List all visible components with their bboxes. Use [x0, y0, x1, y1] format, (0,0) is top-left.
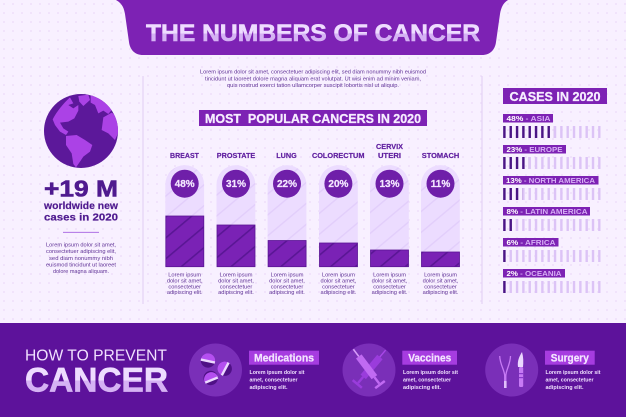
- chart: colorectum 20%: consectetuer: [322, 284, 355, 290]
- label: medications: Lorem ipsum dolor sit: [250, 370, 305, 376]
- chart: stomach 11%: dolor sit amet,: [423, 278, 459, 284]
- label: surgery: [545, 351, 601, 391]
- chart: colorectum 20%: [312, 151, 364, 296]
- description text: euismod tincidunt ut laoreet: [46, 262, 116, 268]
- subheading: worldwide new: [43, 200, 119, 212]
- chart: stomach 11%: 11%: [431, 179, 450, 190]
- chart: lung 22%: dolor sit amet,: [269, 278, 305, 284]
- prevention heading: CANCER: [25, 362, 168, 400]
- intro text block: Lorem ipsum dolor sit amet, consectetuer adipiscing elit, sed diam nonummy nibh euismod: [200, 70, 426, 76]
- icon: globe: [44, 94, 120, 168]
- chart: lung 22%: adipiscing elit.: [269, 290, 305, 296]
- row: latin america: 8% - LATIN AMERICA: [506, 209, 588, 216]
- label: vaccines: adipiscing elit.: [403, 385, 441, 391]
- panel: cases by region: [503, 88, 607, 287]
- chart: breast 48%: adipiscing elit.: [167, 290, 203, 296]
- chart: cervix uteri 13%: CERVIX: [376, 142, 403, 151]
- row: oceania: [503, 269, 600, 287]
- header banner: [116, 0, 508, 55]
- row: oceania: 2% - OCEANIA: [506, 271, 562, 278]
- subheading: cases in 2020: [44, 212, 118, 224]
- intro text block: quis nostrud exerci tation ullamcorper suscipit lobortis nisl ut aliquip.: [227, 83, 399, 89]
- label: surgery: Surgery: [551, 352, 590, 364]
- row: asia: 48% - ASIA: [506, 116, 550, 123]
- chart: colorectum 20%: COLORECTUM: [312, 151, 364, 160]
- panel: worldwide cases: [43, 94, 120, 275]
- chart: breast 48%: [165, 151, 204, 296]
- chart: prostate 31%: consectetuer: [220, 284, 252, 290]
- chart: colorectum 20%: dolor sit amet,: [321, 278, 357, 284]
- description text: [46, 242, 116, 275]
- row: latin america: [503, 207, 600, 225]
- chart: cervix uteri 13%: consectetuer: [373, 284, 406, 290]
- label: surgery: amet, consectetuer: [546, 378, 594, 384]
- label: medications: [249, 351, 319, 391]
- chart: cervix uteri 13%: 13%: [379, 179, 400, 190]
- row: africa: 6% - AFRICA: [506, 240, 556, 247]
- row: north america: 13% - NORTH AMERICA: [506, 178, 595, 185]
- chart: breast 48%: consectetuer: [168, 284, 201, 290]
- chart: prostate 31%: PROSTATE: [217, 151, 255, 160]
- label: medications: adipiscing elit.: [250, 385, 288, 391]
- chart: prostate 31%: Lorem ipsum: [220, 273, 253, 279]
- chart: cervix uteri 13%: [370, 142, 409, 296]
- description text: dolore magna aliquam.: [53, 269, 109, 275]
- label: surgery: adipiscing elit.: [546, 385, 584, 391]
- chart: breast 48%: 48%: [175, 179, 195, 190]
- heading: cases in 2020: CASES IN 2020: [510, 89, 600, 104]
- chart: breast 48%: Lorem ipsum: [168, 273, 201, 279]
- chart: stomach 11%: consectetuer: [424, 284, 457, 290]
- chart: cervix uteri 13%: UTERI: [378, 151, 401, 160]
- chart: breast 48%: dolor sit amet,: [167, 278, 203, 284]
- row: europe: [503, 145, 600, 163]
- intro text block: tincidunt ut laoreet dolore magna aliquam erat volutpat. Ut wisi enim ad minim veniam,: [205, 76, 421, 82]
- row: europe: 23% - EUROPE: [506, 147, 563, 154]
- chart: cervix uteri 13%: adipiscing elit.: [372, 290, 408, 296]
- big number: +19 M: [44, 176, 118, 202]
- subheading: [43, 200, 119, 224]
- label: vaccines: Vaccines: [408, 352, 451, 364]
- chart: breast 48%: BREAST: [170, 151, 199, 160]
- chart: stomach 11%: STOMACH: [422, 151, 459, 160]
- label: vaccines: Lorem ipsum dolor sit: [403, 370, 458, 376]
- chart: lung 22%: consectetuer: [271, 284, 303, 290]
- label: surgery: Lorem ipsum dolor sit: [546, 370, 601, 376]
- chart: lung 22%: LUNG: [276, 151, 297, 160]
- chart: colorectum 20%: adipiscing elit.: [321, 290, 357, 296]
- panel: how to prevent cancer: [0, 323, 626, 417]
- row: asia: [503, 114, 600, 132]
- icon: surgical tools: [485, 344, 538, 396]
- chart: colorectum 20%: Lorem ipsum: [322, 273, 355, 279]
- heading: most popular cancers: MOST POPULAR CANCERS IN 2020: [205, 111, 421, 126]
- chart: prostate 31%: 31%: [226, 179, 246, 190]
- label: vaccines: amet, consectetuer: [403, 378, 452, 384]
- chart: prostate 31%: dolor sit amet,: [218, 278, 254, 284]
- chart: lung 22%: 22%: [277, 179, 297, 190]
- title: THE NUMBERS OF CANCER: [146, 20, 480, 47]
- chart: colorectum 20%: 20%: [328, 179, 349, 190]
- prevention heading: HOW TO PREVENT: [25, 348, 168, 365]
- chart: stomach 11%: Lorem ipsum: [424, 273, 457, 279]
- chart: lung 22%: [268, 151, 306, 296]
- description text: consectetuer adipiscing elit,: [46, 249, 116, 255]
- intro text block: [200, 70, 426, 89]
- row: africa: [503, 238, 600, 256]
- label: medications: amet, consectetuer: [250, 378, 298, 384]
- chart: lung 22%: Lorem ipsum: [271, 273, 304, 279]
- icon: pills: [189, 344, 242, 396]
- chart: stomach 11%: adipiscing elit.: [423, 290, 459, 296]
- description text: sed diam nonummy nibh: [49, 256, 113, 262]
- label: vaccines: [402, 351, 458, 391]
- description text: Lorem ipsum dolor sit amet,: [46, 242, 116, 248]
- chart: cervix uteri 13%: dolor sit amet,: [372, 278, 408, 284]
- chart: prostate 31%: [216, 151, 255, 296]
- label: medications: Medications: [254, 352, 314, 364]
- chart: stomach 11%: [421, 151, 460, 296]
- chart: cervix uteri 13%: Lorem ipsum: [373, 273, 406, 279]
- row: north america: [503, 176, 600, 194]
- icon: syringes: [342, 344, 396, 396]
- chart: prostate 31%: adipiscing elit.: [218, 290, 254, 296]
